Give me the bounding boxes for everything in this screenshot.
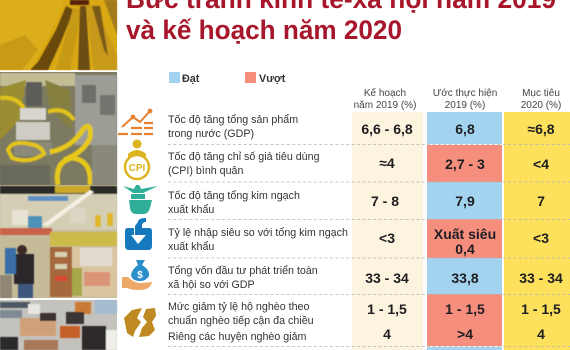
title: và kế hoạch năm 2020 xyxy=(126,15,402,45)
table values: <4 xyxy=(533,156,549,172)
column headers: Kế hoạch xyxy=(364,87,406,99)
photo: garment workers xyxy=(0,300,117,350)
legend: Vượt xyxy=(259,73,286,85)
photo: car factory robots xyxy=(0,72,117,185)
row labels: Tốc độ tăng chỉ số giá tiêu dùng xyxy=(168,151,320,163)
icon: CPI person: CPI xyxy=(129,163,146,174)
column headers: năm 2019 (%) xyxy=(354,100,416,111)
table values: 7,9 xyxy=(455,193,475,209)
row labels: chuẩn nghèo tiếp cận đa chiều xyxy=(168,315,314,327)
table values: 0,4 xyxy=(455,241,475,257)
row labels: xuất khẩu xyxy=(168,204,214,216)
icon: broken poverty xyxy=(124,308,156,337)
table values: ≈4 xyxy=(379,155,395,171)
table values: 33 - 34 xyxy=(365,270,409,286)
table values: <3 xyxy=(379,230,395,246)
table values: 7 - 8 xyxy=(371,193,399,209)
row labels: trong nước (GDP) xyxy=(168,128,254,140)
table values: >4 xyxy=(457,326,473,342)
table values: 7 xyxy=(537,193,545,209)
icon: hand with money bag xyxy=(122,260,152,290)
icon: CPI person xyxy=(125,140,149,179)
legend: Đạt xyxy=(182,73,200,85)
table values: <3 xyxy=(533,230,549,246)
row labels: Tỷ lệ nhập siêu so với tổng kim ngạch xyxy=(168,227,348,239)
row labels: Riêng các huyện nghèo giảm xyxy=(168,331,307,343)
column headers: 2019 (%) xyxy=(445,100,485,111)
table values: 4 xyxy=(383,326,391,342)
photo: supermarket xyxy=(0,185,117,298)
table values: 1 - 1,5 xyxy=(445,301,485,317)
column headers: Ước thực hiện xyxy=(433,88,497,99)
column headers: 2020 (%) xyxy=(521,100,561,111)
row labels: Tổng vốn đầu tư phát triển toàn xyxy=(168,265,318,277)
row dividers xyxy=(168,144,570,346)
table values: 33 - 34 xyxy=(519,270,563,286)
row labels: xã hội so với GDP xyxy=(168,279,255,291)
table values: 1 - 1,5 xyxy=(521,301,561,317)
table values: 33,8 xyxy=(451,270,479,286)
table values: 1 - 1,5 xyxy=(367,301,407,317)
row labels: Tốc độ tăng tổng sản phẩm xyxy=(168,114,298,126)
row labels xyxy=(168,114,348,343)
table values: 2,7 - 3 xyxy=(445,156,485,172)
row labels: (CPI) bình quân xyxy=(168,165,244,177)
table values: Xuất siêu xyxy=(434,226,496,242)
title xyxy=(126,0,556,45)
icon: import arrow box xyxy=(125,218,152,250)
icon: plane and ship xyxy=(123,185,158,214)
row labels: xuất khẩu xyxy=(168,241,214,253)
row labels: Tốc độ tăng tổng kim ngạch xyxy=(168,190,300,202)
legend xyxy=(169,72,286,85)
table columns xyxy=(352,112,570,350)
photo: rice field harvest xyxy=(0,0,117,70)
row labels: Mức giảm tỷ lệ hộ nghèo theo xyxy=(168,301,309,313)
table values: 4 xyxy=(537,326,545,342)
table values xyxy=(361,121,563,342)
icon: GDP growth chart xyxy=(118,110,153,134)
table values: 6,6 - 6,8 xyxy=(361,121,413,137)
icon: hand with money bag: $ xyxy=(137,270,143,281)
table values: ≈6,8 xyxy=(527,121,555,137)
table values: 6,8 xyxy=(455,121,475,137)
column headers: Mục tiêu xyxy=(522,88,560,99)
column headers xyxy=(354,87,561,111)
